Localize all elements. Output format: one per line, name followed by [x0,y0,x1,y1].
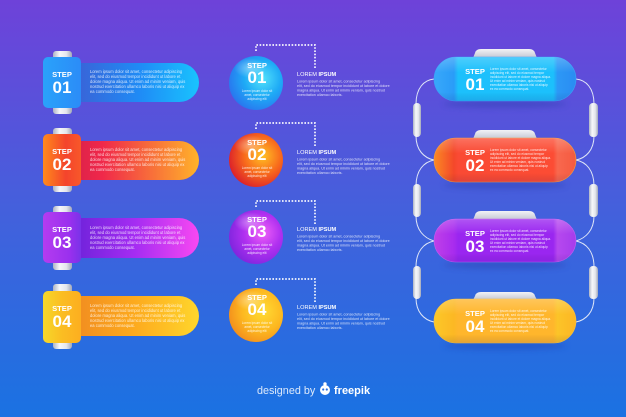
label: step 04 [52,304,72,331]
text block 04: elit, sed do eiusmod tempor incididunt ut labore et [90,308,181,313]
label: sphere step 01: STEP [247,61,267,70]
text block sphere 02: magna aliqua. Ut enim ad minim veniam, quis nostrud [297,166,385,170]
text block pill 01: incididunt ut labore et dolore magna aliqua. [490,75,551,79]
text block pill 02 [490,148,551,172]
text block sphere 02: Lorem ipsum dolor sit amet, consectetur adipiscing [297,158,380,162]
text block pill 04: Ut enim ad minim veniam, quis nostrud [490,321,545,325]
label: sphere step 04: 04 [248,300,267,319]
sphere caption 04: Lorem ipsum dolor sit [242,321,272,325]
text block 03 [90,225,185,250]
panel: left step 02 [43,128,199,192]
label: sphere step 03: 03 [248,222,266,241]
sphere caption 02: amet, consectetur [244,170,271,174]
heading 03: LOREM IPSUM [297,227,337,233]
panel: pill step 01 [434,49,576,108]
text block pill 04: adipiscing elit, sed do eiusmod tempor [490,313,545,317]
icon: pill top cap 02 [473,130,537,139]
icon: top and bottom rollers 03 [53,206,72,270]
text block sphere 04 [297,312,390,330]
label: step 01: STEP [52,70,72,79]
text block 02: elit, sed do eiusmod tempor incididunt ut labore et [90,152,181,157]
sphere caption 03 [242,243,272,255]
label: step 03 [52,225,72,252]
sphere caption 03: Lorem ipsum dolor sit [242,243,272,247]
label: sphere step 04: STEP [247,293,267,302]
label: sphere step 03: STEP [247,215,267,224]
text block 02: dolore magna aliqua. Ut enim ad minim veniam, quis [90,157,185,162]
icon: sphere 02 [229,133,283,187]
text block pill 03: ex ea commodo consequat. [490,249,529,253]
text block pill 01: Ut enim ad minim veniam, quis nostrud [490,79,545,83]
text block 03: ea commodo consequat. [90,245,135,250]
icon: sphere 04 [229,288,283,342]
label: step 03: STEP [52,225,72,234]
text block sphere 04: Lorem ipsum dolor sit amet, consectetur adipiscing [297,312,380,316]
text block 01: dolore magna aliqua. Ut enim ad minim veniam, quis [90,79,185,84]
label: step 02 [52,147,72,174]
sphere caption 03: adipiscing elit [247,251,267,255]
text block sphere 01: exercitation ullamco laboris. [297,93,342,97]
icon: pill top cap 04 [473,292,537,300]
text block pill 02: incididunt ut labore et dolore magna aliqua. [490,156,551,160]
text block sphere 04: exercitation ullamco laboris. [297,326,342,330]
sphere caption 01: Lorem ipsum dolor sit [242,89,272,93]
text block sphere 03: exercitation ullamco laboris. [297,248,342,252]
label: pill step 03 [465,229,485,256]
panel: pill step 02 [434,130,576,189]
text block pill 03 [490,229,551,253]
text block pill 02: adipiscing elit, sed do eiusmod tempor [490,152,545,156]
sphere caption 02: Lorem ipsum dolor sit [242,166,272,170]
text block 01: ea commodo consequat. [90,89,135,94]
text block 03: nostrud exercitation ullamco laboris nisi ut aliquip ex [90,240,184,245]
text block pill 02: Lorem ipsum dolor sit amet, consectetur [490,148,548,152]
text block pill 03: incididunt ut labore et dolore magna aliqua. [490,237,551,241]
footer: designed by freepik [257,382,371,397]
text block 01: nostrud exercitation ullamco laboris nisi ut aliquip ex [90,84,184,89]
icon: top and bottom rollers 02 [53,128,72,192]
label: step 04: 04 [53,312,72,331]
text block 02: nostrud exercitation ullamco laboris nisi ut aliquip ex [90,162,184,167]
text block sphere 03: elit, sed do eiusmod tempor incididunt ut labore et dolore [297,239,390,243]
text block sphere 01: Lorem ipsum dolor sit amet, consectetur adipiscing [297,80,380,84]
label: step 01 [52,70,72,97]
text block pill 03: adipiscing elit, sed do eiusmod tempor [490,233,545,237]
text block sphere 02: exercitation ullamco laboris. [297,171,342,175]
footer: designed by freepik: designed by [257,385,316,397]
text block pill 02: ex ea commodo consequat. [490,168,529,172]
heading 04: LOREM IPSUM [297,305,337,311]
text block 01: elit, sed do eiusmod tempor incididunt ut labore et [90,74,181,79]
label: step 02: STEP [52,147,72,156]
label: pill step 04: STEP [465,309,485,318]
label: pill step 03: STEP [465,229,485,238]
text block pill 02: Ut enim ad minim veniam, quis nostrud [490,160,545,164]
text block sphere 04: elit, sed do eiusmod tempor incididunt ut labore et dolore [297,317,390,321]
text block 04: nostrud exercitation ullamco laboris nisi ut aliquip ex [90,318,184,323]
panel: sphere step 01 [229,45,390,110]
heading 02: LOREM IPSUM [297,150,337,156]
text block pill 01 [490,67,551,91]
panel: sphere step 02 [229,123,390,187]
text block pill 01: exercitation ullamco laboris nisi ut aliquip [490,83,548,87]
text block 04: Lorem ipsum dolor sit amet, consectetur adipiscing [90,303,183,308]
panel: sphere step 03 [229,201,390,264]
text block 03: dolore magna aliqua. Ut enim ad minim veniam, quis [90,235,185,240]
text block 04: ea commodo consequat. [90,323,135,328]
text block pill 01: ex ea commodo consequat. [490,87,529,91]
text block sphere 01: magna aliqua. Ut enim ad minim veniam, quis nostrud [297,88,385,92]
heading 01: LOREM IPSUM [297,72,337,78]
panel: left step 03 [43,206,199,270]
icon: top and bottom rollers 04 [53,284,72,349]
connectors between pills [413,79,598,322]
text block pill 04: Lorem ipsum dolor sit amet, consectetur [490,309,548,313]
label: step 04: STEP [52,304,72,313]
label: sphere step 01 [247,61,267,87]
sphere caption 03: amet, consectetur [244,247,271,251]
text block pill 03: Lorem ipsum dolor sit amet, consectetur [490,229,548,233]
pill body 02 [434,138,576,182]
panel: sphere step 04 [229,279,390,342]
footer: designed by freepik: freepik [334,385,371,397]
text block sphere 03: Lorem ipsum dolor sit amet, consectetur adipiscing [297,234,380,238]
label: sphere step 02: STEP [247,138,267,147]
sphere caption 01 [242,89,272,101]
tab: step 04 [43,291,81,343]
pill body 01 [434,57,576,101]
label: pill step 02: STEP [465,148,485,157]
panel: left step 01 [43,51,199,114]
panel: left step 04 [43,284,199,349]
sphere caption 04 [242,321,272,333]
text block pill 01: adipiscing elit, sed do eiusmod tempor [490,71,545,75]
icon: sphere 01 [229,56,283,110]
pill body 04 [434,299,576,343]
label: sphere step 03 [247,215,267,241]
panel: pill step 03 [434,211,576,269]
icon: pill top cap 03 [473,211,537,220]
label: pill step 02: 02 [466,156,484,175]
tab: step 02 [43,134,81,186]
text block 02: ea commodo consequat. [90,167,135,172]
label: pill step 01 [465,67,485,94]
label: pill step 02 [465,148,485,175]
text block sphere 01 [297,80,390,97]
pill body 03 [434,219,576,262]
text block pill 02: exercitation ullamco laboris nisi ut aliquip [490,164,548,168]
icon: sphere 03 [229,210,283,264]
sphere caption 02 [242,166,272,178]
label: pill step 04: 04 [466,317,485,336]
label: sphere step 04 [247,293,267,319]
text block pill 03: Ut enim ad minim veniam, quis nostrud [490,241,545,245]
text block sphere 04: magna aliqua. Ut enim ad minim veniam, quis nostrud [297,322,385,326]
sphere caption 01: adipiscing elit [247,97,267,101]
tab: step 03 [43,212,81,263]
text block 01 [90,69,185,94]
tab: step 01 [43,57,81,108]
text block sphere 03: magna aliqua. Ut enim ad minim veniam, quis nostrud [297,244,385,248]
label: pill step 04 [465,309,485,336]
label: pill step 01: STEP [465,67,485,76]
text block pill 04 [490,309,551,333]
sphere caption 04: adipiscing elit [247,329,267,333]
icon: freepik mascot [320,382,330,395]
text block 04 [90,303,185,328]
text block 02: Lorem ipsum dolor sit amet, consectetur adipiscing [90,147,183,152]
text block 03: Lorem ipsum dolor sit amet, consectetur adipiscing [90,225,183,230]
label: pill step 03: 03 [466,237,484,256]
label: sphere step 02: 02 [248,145,266,164]
text block 03: elit, sed do eiusmod tempor incididunt ut labore et [90,230,181,235]
label: sphere step 02 [247,138,267,164]
label: step 03: 03 [53,233,71,252]
label: sphere step 01: 01 [248,68,266,87]
text block 02 [90,147,185,172]
sphere caption 02: adipiscing elit [247,174,267,178]
text block 04: dolore magna aliqua. Ut enim ad minim veniam, quis [90,313,185,318]
sphere caption 01: amet, consectetur [244,93,271,97]
icon: pill top cap 01 [473,49,537,58]
text block sphere 03 [297,234,390,252]
text block 01: Lorem ipsum dolor sit amet, consectetur adipiscing [90,69,183,74]
label: step 02: 02 [53,155,71,174]
text block sphere 02: elit, sed do eiusmod tempor incididunt ut labore et dolore [297,162,390,166]
text block pill 04: exercitation ullamco laboris nisi ut aliquip [490,325,548,329]
text block pill 04: incididunt ut labore et dolore magna aliqua. [490,317,551,321]
sphere caption 04: amet, consectetur [244,325,271,329]
text block pill 01: Lorem ipsum dolor sit amet, consectetur [490,67,548,71]
label: pill step 01: 01 [466,75,484,94]
text block pill 04: ex ea commodo consequat. [490,329,529,333]
text block sphere 01: elit, sed do eiusmod tempor incididunt ut labore et dolore [297,84,390,88]
label: step 01: 01 [53,78,71,97]
text block sphere 02 [297,158,390,175]
panel: pill step 04 [434,292,576,350]
text block pill 03: exercitation ullamco laboris nisi ut aliquip [490,245,548,249]
icon: top and bottom rollers 01 [53,51,72,114]
